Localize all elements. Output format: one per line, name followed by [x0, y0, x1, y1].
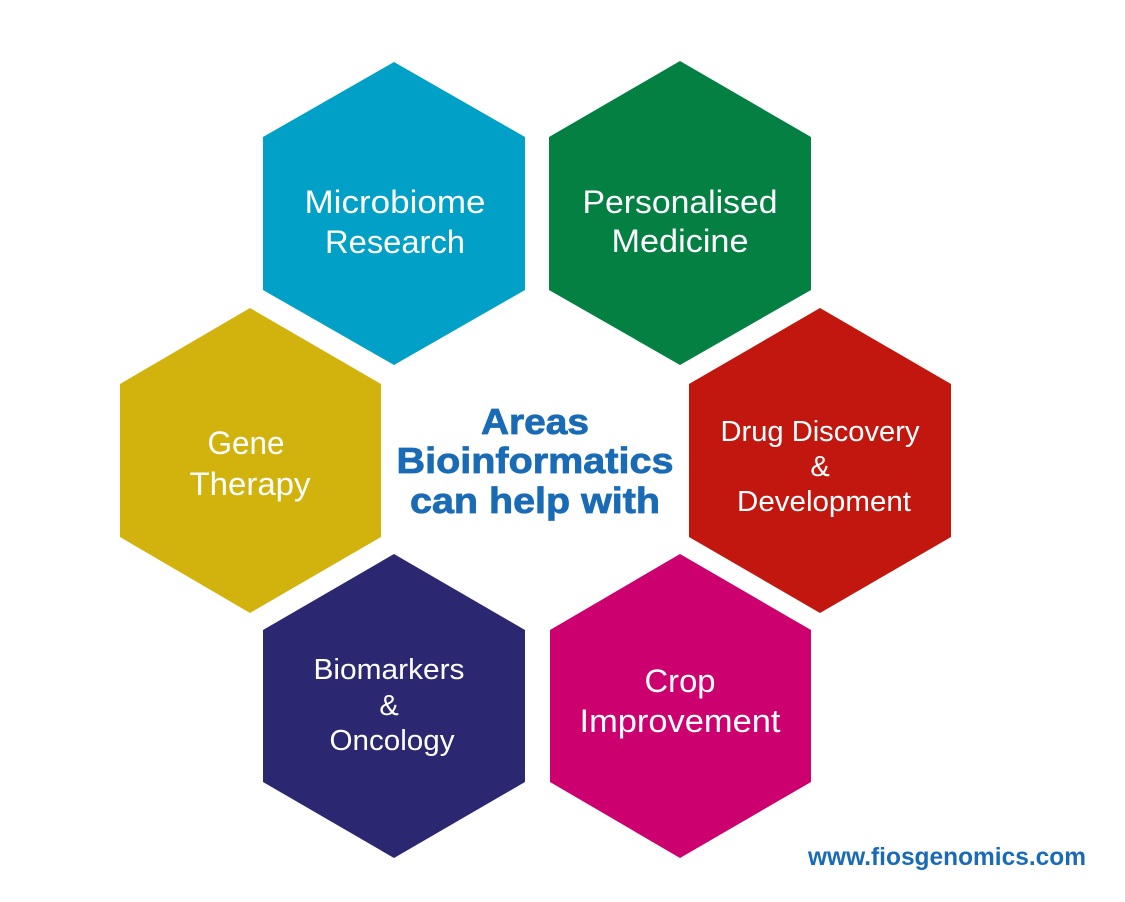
hexagon: Biomarkers and Oncology: Oncology [330, 725, 455, 757]
central title: Areas [481, 401, 589, 442]
hexagon: Microbiome Research: Research [325, 224, 465, 260]
hexagon: Drug Discovery and Development: & [810, 451, 830, 483]
hexagon: Biomarkers and Oncology: Biomarkers [314, 654, 464, 686]
hexagon: Biomarkers and Oncology: & [379, 690, 399, 722]
hexagon: Gene Therapy: Therapy [190, 466, 310, 502]
central title [396, 401, 674, 521]
hexagon: Personalised Medicine [549, 61, 811, 365]
hexagon: Personalised Medicine: Personalised [582, 184, 778, 220]
hexagon: Drug Discovery and Development: Development [737, 486, 911, 518]
central title: can help with [410, 480, 660, 521]
hexagon: Biomarkers and Oncology [263, 554, 525, 858]
hexagon: Crop Improvement [550, 554, 811, 858]
hexagon: Drug Discovery and Development [689, 308, 951, 613]
hexagon: Drug Discovery and Development: Drug Discovery [720, 416, 920, 448]
hexagon: Gene Therapy: Gene [208, 425, 284, 461]
hexagon: Microbiome Research [263, 62, 525, 365]
hexagon: Microbiome Research: Microbiome [304, 184, 486, 220]
central title: Bioinformatics [396, 440, 674, 481]
hexagon: Crop Improvement: Improvement [580, 703, 781, 739]
website url: www.fiosgenomics.com [807, 843, 1086, 871]
hexagon: Personalised Medicine: Medicine [612, 223, 748, 259]
hexagon: Crop Improvement: Crop [644, 663, 716, 699]
hexagon: Gene Therapy [120, 308, 381, 613]
